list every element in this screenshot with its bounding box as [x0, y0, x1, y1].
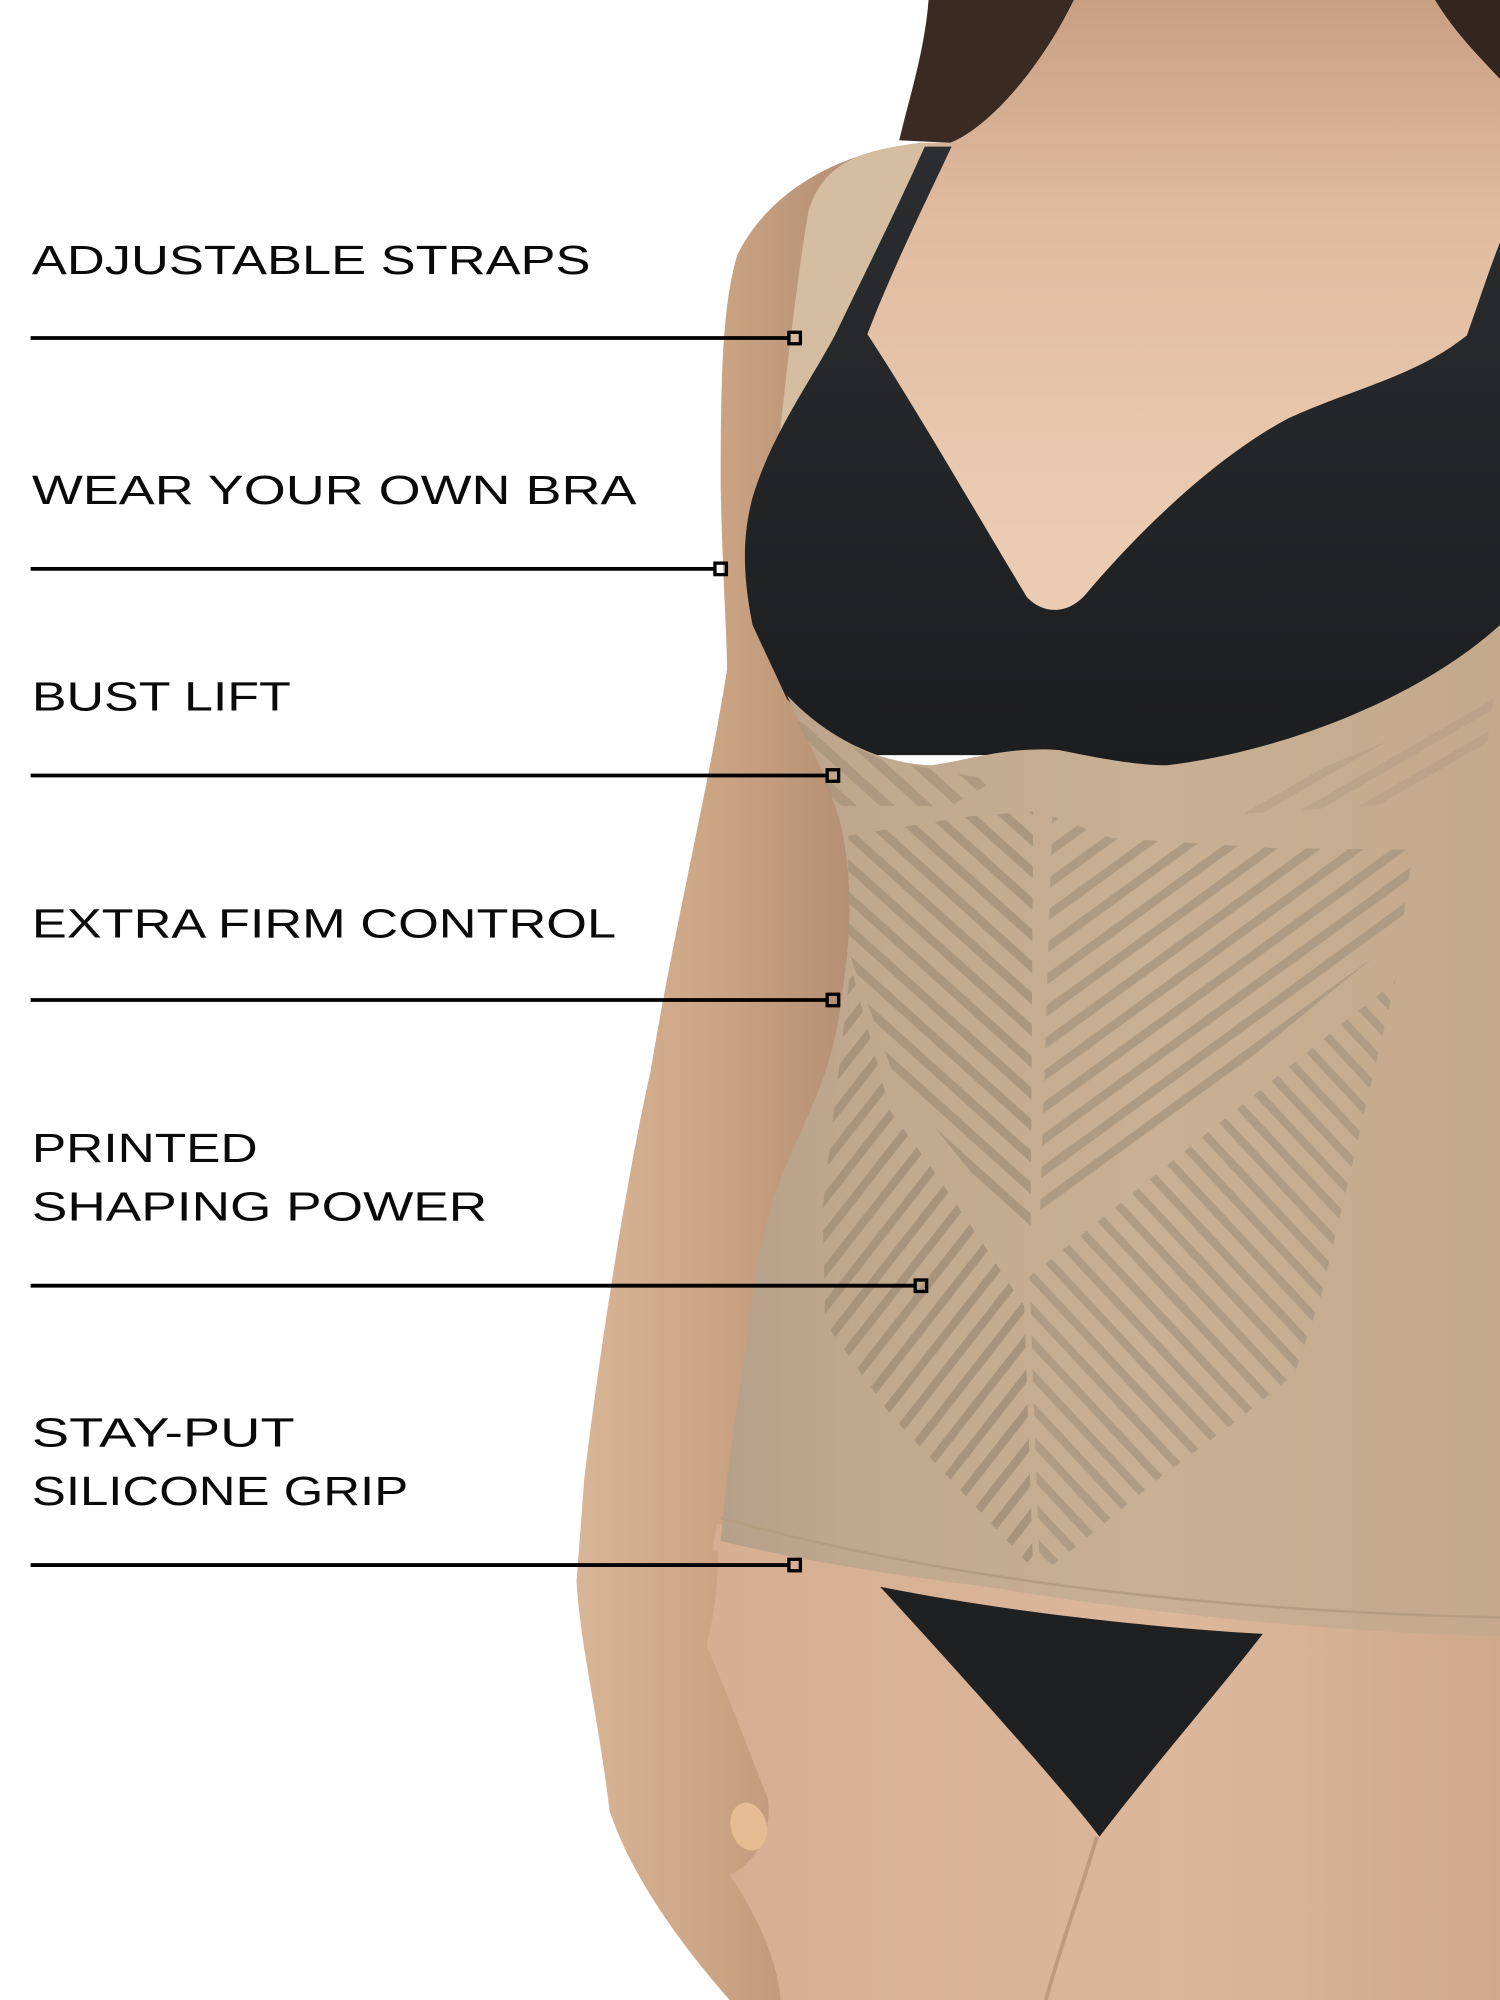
callout: bust lift: BUST LIFT	[32, 673, 291, 719]
hand	[577, 1550, 781, 2000]
shapewear body	[721, 625, 1500, 1636]
fingernail	[725, 1798, 772, 1855]
stripes: lower left chevron	[823, 967, 1033, 1569]
hips and thighs	[695, 1524, 1500, 2000]
callout: adjustable straps: ADJUSTABLE STRAPS	[32, 237, 591, 283]
black briefs	[880, 1587, 1263, 1837]
leg crease	[1046, 1837, 1097, 2000]
callout: extra firm control: EXTRA FIRM CONTROL	[32, 901, 616, 947]
model figure	[577, 0, 1500, 2000]
stripes: upper right chevron	[1040, 816, 1413, 1231]
callout: wear your own bra: WEAR YOUR OWN BRA	[32, 467, 638, 513]
arm	[577, 143, 921, 1582]
hem band	[721, 1518, 1500, 1617]
callout: stay-put silicone grip: STAY-PUT	[32, 1409, 295, 1455]
hair left	[899, 0, 1074, 143]
callout: adjustable straps	[31, 237, 800, 344]
shoulder strap	[778, 143, 929, 449]
callout: stay-put silicone grip	[31, 1409, 800, 1571]
callout: stay-put silicone grip: SILICONE GRIP	[32, 1468, 408, 1514]
callout: printed shaping power: SHAPING POWER	[32, 1184, 487, 1230]
hair right	[1435, 0, 1500, 79]
callout: bust lift	[31, 673, 839, 781]
stripes: upper left chevron	[848, 811, 1033, 1237]
callout: printed shaping power	[31, 1125, 927, 1291]
callout: printed shaping power: PRINTED	[32, 1125, 258, 1171]
black bra	[745, 147, 1500, 768]
callout: extra firm control	[31, 900, 839, 1006]
garment base	[721, 625, 1500, 1636]
stripes: upper right band	[1205, 689, 1495, 816]
stripes: upper left band	[797, 721, 995, 806]
stripes: lower right chevron	[1029, 981, 1395, 1569]
neck and chest	[791, 0, 1500, 714]
callout: wear your own bra	[31, 467, 726, 575]
